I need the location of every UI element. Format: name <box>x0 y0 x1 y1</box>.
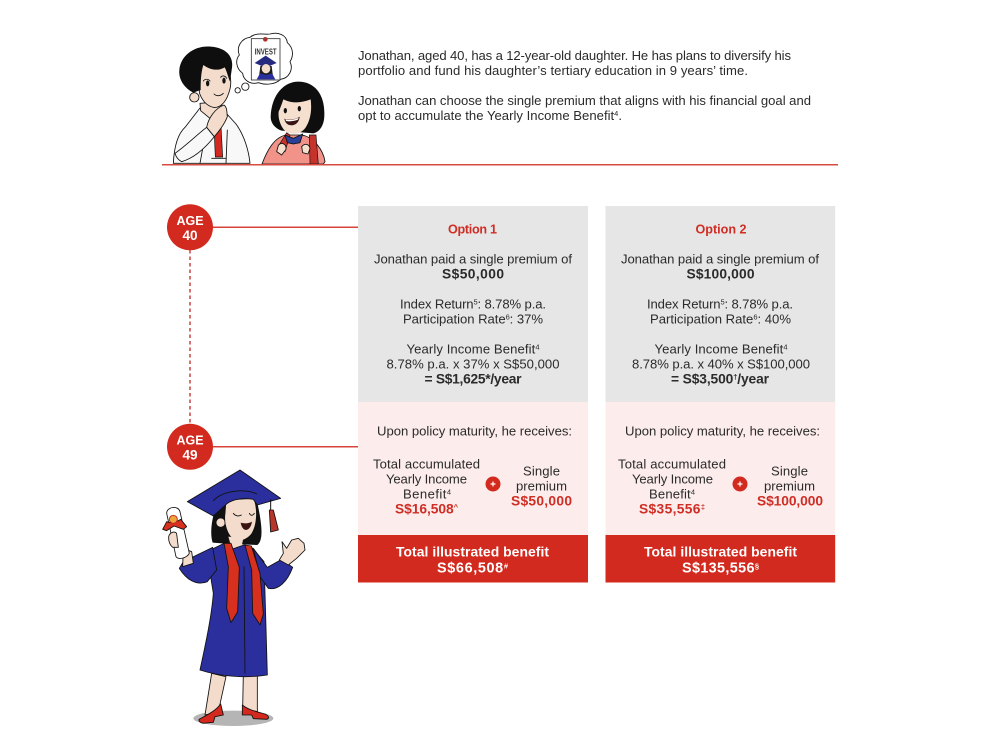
age 49 marker: 49 <box>182 448 198 462</box>
intro text block: Jonathan can choose the single premium that aligns with his financial goal and <box>358 93 811 108</box>
option 2 premium details: : 8.78% p.a. <box>725 296 793 312</box>
option 2 total banner: § <box>755 562 759 570</box>
option 1 total banner <box>358 535 588 582</box>
option 1 maturity breakdown: S$16,508 <box>395 502 454 516</box>
panel: option 1 <box>358 206 588 582</box>
option 1 premium details <box>358 206 588 402</box>
option 1 premium details: : 8.78% p.a. <box>478 296 546 312</box>
option 2 premium details: 5 <box>720 298 725 306</box>
option 1 total banner: S$66,508 <box>437 560 503 576</box>
option 2 premium details: 8.78% p.a. x 40% x S$100,000 <box>632 356 810 372</box>
option 2 maturity breakdown: premium <box>764 478 815 494</box>
option 2 maturity breakdown: Yearly Income <box>632 472 713 486</box>
intro text block: opt to accumulate the Yearly Income Benefit <box>358 108 614 123</box>
option 1 premium details: : 37% <box>510 312 543 326</box>
option 1 premium details: 4 <box>535 342 540 352</box>
option 2 maturity breakdown: Total accumulated <box>618 456 726 472</box>
option 1 maturity breakdown: Benefit <box>403 486 446 502</box>
option 1 premium details: Index Return <box>400 296 474 312</box>
age 49 marker: AGE <box>176 434 204 448</box>
age 40 marker <box>167 204 213 250</box>
icon: thought bubble <box>235 33 292 93</box>
option 1 maturity breakdown: S$50,000 <box>511 494 572 508</box>
option 2 premium details: Participation Rate <box>650 312 753 326</box>
intro text block: portfolio and fund his daughter’s tertiary education in 9 years’ time. <box>358 63 748 78</box>
option 1 maturity breakdown <box>358 402 588 535</box>
intro text block <box>358 48 811 123</box>
intro text block: . <box>618 108 622 123</box>
option 1 premium details: 5 <box>473 298 478 306</box>
option 2 total banner <box>606 535 835 582</box>
option 1 premium details: Option 1 <box>448 222 497 236</box>
right hand <box>279 538 305 565</box>
option 1 total banner: Total illustrated benefit <box>396 544 549 560</box>
hair <box>211 499 262 545</box>
panel: option 2 <box>606 206 835 582</box>
option 2 premium details: : 40% <box>758 312 791 326</box>
option 2 premium details: = S$3,500 <box>671 372 733 386</box>
option 1 maturity breakdown: Total accumulated <box>373 456 480 472</box>
face <box>216 498 257 557</box>
option 2 premium details: 4 <box>783 342 788 352</box>
option 2 total banner: Total illustrated benefit <box>644 544 797 560</box>
option 1 premium details: Participation Rate <box>403 312 506 326</box>
option 1 premium details: Yearly Income Benefit <box>406 342 535 356</box>
option 2 maturity breakdown: ‡ <box>701 502 705 512</box>
gown <box>179 543 293 677</box>
age 49 marker <box>167 424 213 470</box>
option 1 maturity breakdown: Yearly Income <box>386 472 467 486</box>
icon: daughter <box>262 82 325 164</box>
timeline <box>167 204 358 470</box>
option 2 premium details: Index Return <box>647 296 721 312</box>
option 2 premium details: /year <box>737 372 770 386</box>
option 2 total banner: S$135,556 <box>682 560 754 576</box>
option 2 maturity breakdown: S$100,000 <box>757 494 823 508</box>
option 2 premium details: S$100,000 <box>686 266 755 282</box>
icon: thought bubble: INVEST <box>255 46 277 56</box>
illustration: Jonathan and daughter <box>173 33 325 164</box>
option 1 premium details: S$50,000 <box>442 266 504 282</box>
shadow <box>193 711 273 726</box>
option 2 premium details: † <box>733 372 737 382</box>
option 1 premium details: 8.78% p.a. x 37% x S$50,000 <box>386 356 560 372</box>
option 2 premium details: 6 <box>753 312 758 322</box>
option 1 maturity breakdown: 4 <box>447 488 451 496</box>
option 2 maturity breakdown: Single <box>771 464 808 478</box>
age 40 marker: 40 <box>182 228 198 243</box>
option 1 maturity breakdown: premium <box>516 478 567 494</box>
option 1 maturity breakdown: Single <box>523 464 560 478</box>
option 1 premium details: Jonathan paid a single premium of <box>374 252 572 266</box>
option 2 maturity breakdown: Upon policy maturity, he receives: <box>625 424 820 438</box>
intro text block: 4 <box>614 109 618 118</box>
legs and shoes <box>199 673 268 723</box>
option 1 premium details: 6 <box>506 312 510 322</box>
illustration: graduate <box>163 470 305 726</box>
option 1 total banner: # <box>504 562 509 570</box>
icon: plus <box>732 476 748 492</box>
option 2 maturity breakdown: 4 <box>691 488 695 496</box>
icon: plus <box>486 476 500 492</box>
intro text block: Jonathan, aged 40, has a 12-year-old daughter. He has plans to diversify his <box>358 48 791 63</box>
option 2 premium details <box>606 206 835 402</box>
option 2 maturity breakdown <box>606 402 835 535</box>
option 1 premium details: = S$1,625*/year <box>424 372 522 386</box>
scroll and hand <box>163 507 193 567</box>
option 2 maturity breakdown: S$35,556 <box>639 502 700 516</box>
option 2 premium details: Yearly Income Benefit <box>654 342 783 356</box>
option 2 maturity breakdown: Benefit <box>649 486 691 502</box>
age 40 marker: AGE <box>176 214 204 228</box>
mortarboard cap <box>187 470 281 532</box>
option 1 maturity breakdown: ^ <box>454 502 459 512</box>
option 1 maturity breakdown: Upon policy maturity, he receives: <box>377 424 572 438</box>
option 2 premium details: Jonathan paid a single premium of <box>621 252 819 266</box>
option 2 premium details: Option 2 <box>696 222 746 236</box>
icon: Jonathan <box>173 47 250 163</box>
